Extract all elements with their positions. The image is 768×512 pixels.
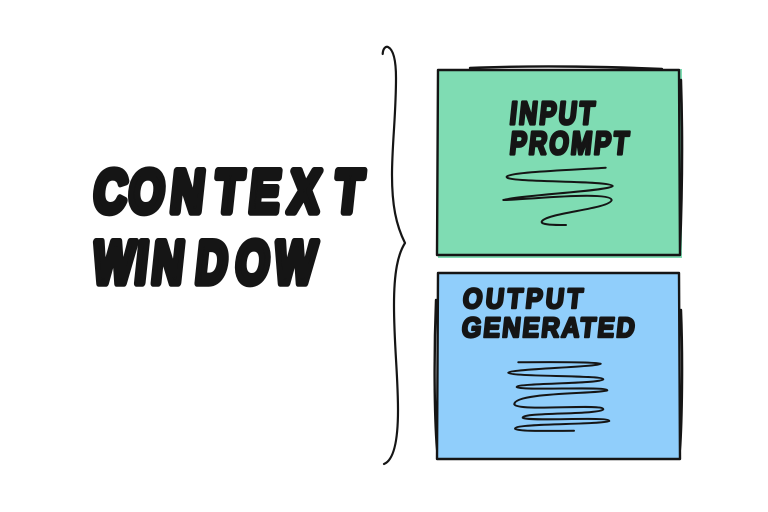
title: context window: WINDOW [90,230,319,297]
panel heading: PROMPT [508,126,631,162]
panel outline [435,273,682,459]
panel heading: INPUT [508,96,597,132]
title: context window: CONTEXT [91,159,367,225]
panel heading [508,96,631,162]
panel heading [460,283,636,343]
panel heading: OUTPUT [461,283,585,314]
panel fill: green [438,69,682,258]
scribble: placeholder text [503,168,613,225]
scribble: placeholder text [508,362,609,431]
title: context window [90,159,367,297]
panel heading: GENERATED [460,312,636,343]
panel fill: blue [438,274,679,458]
panel: input prompt [437,66,682,258]
curly brace [383,47,405,464]
panel: output generated [435,273,682,459]
panel outline [437,66,682,255]
